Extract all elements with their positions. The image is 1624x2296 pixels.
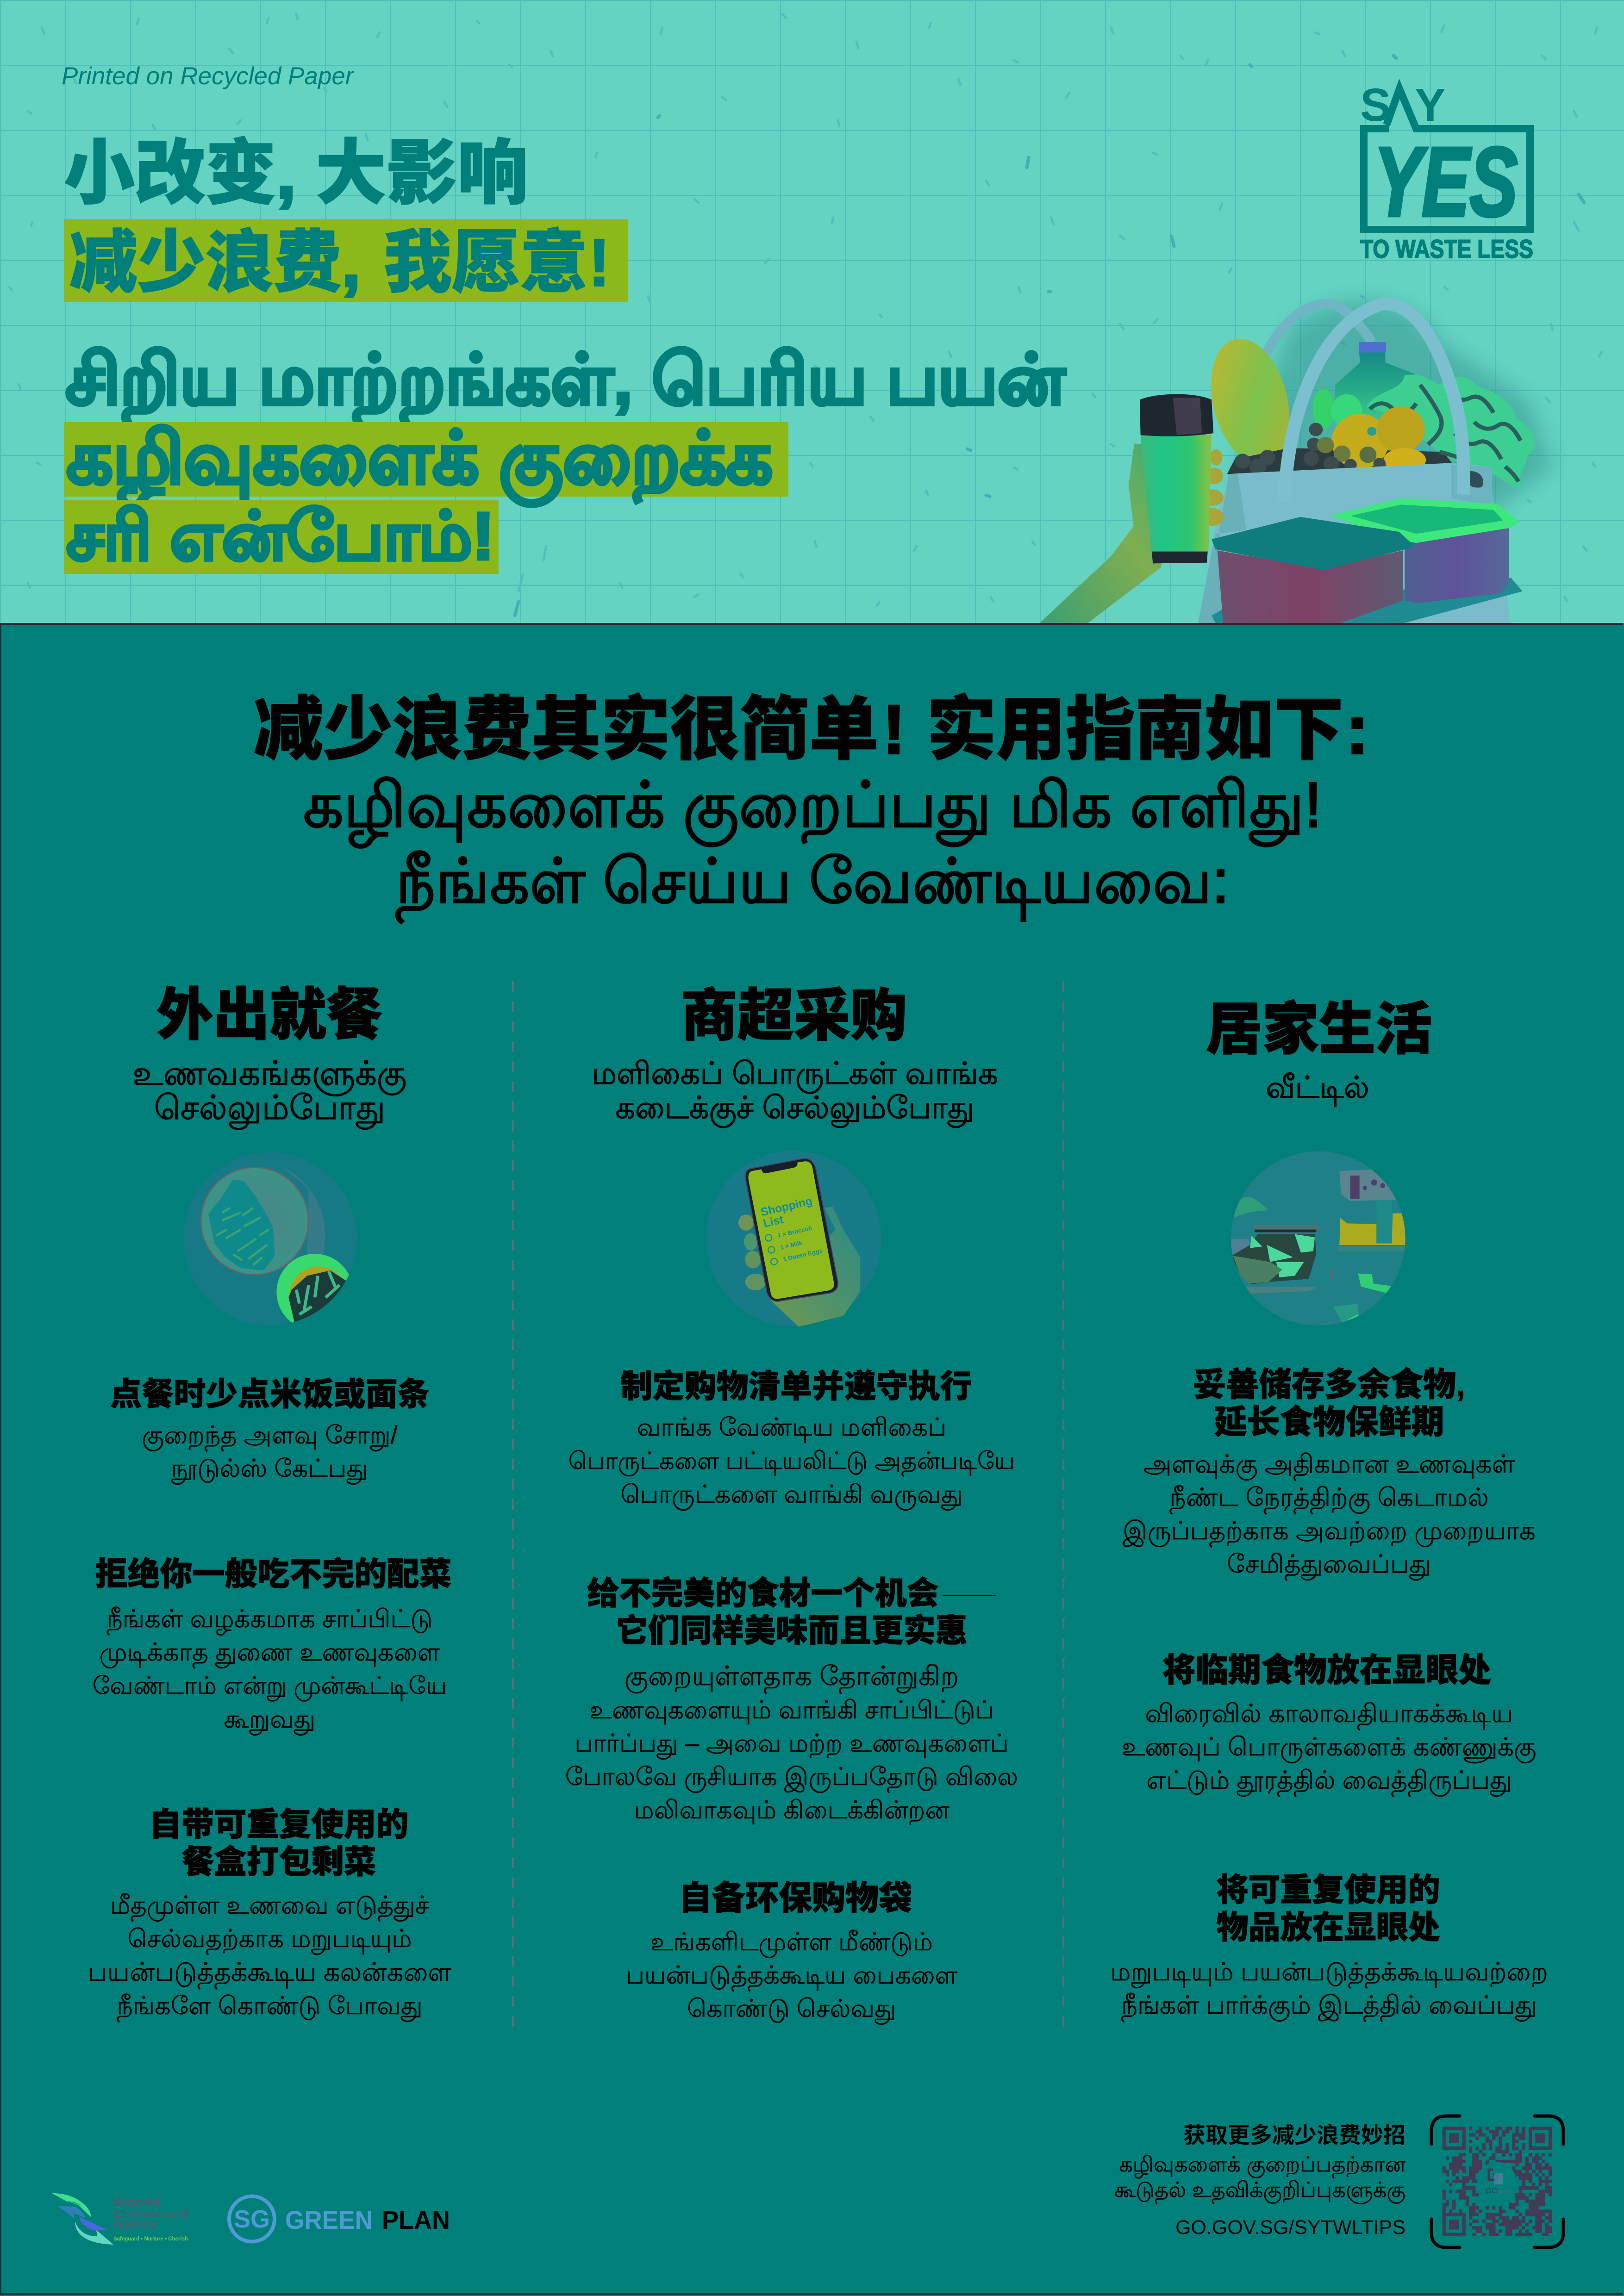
callout: more tips text: GO.GOV.SG/SYTWLTIPS — [1175, 2216, 1405, 2239]
tip: refuse side dishes: வேண்டாம் என்று முன்கூட்டியே — [93, 1672, 447, 1699]
tip: expiring food in sight — [1069, 1652, 1589, 1797]
logo: SG Green Plan: GREEN — [285, 2205, 373, 2234]
column heading: dining out: 外出就餐 — [156, 983, 382, 1046]
phone frame — [745, 1158, 838, 1301]
tip: bring reusable bags: 自备环保购物袋 — [679, 1880, 912, 1917]
shopping list text: 1 × Broccoli — [777, 1225, 812, 1239]
column subheading: dining out: செல்லும்போது — [154, 1089, 385, 1126]
tip: reusables in sight: மறுபடியும் பயன்படுத்தக்கூடியவற்றை — [1110, 1957, 1548, 1986]
bag body — [1198, 463, 1511, 623]
red lunch box — [1212, 517, 1416, 623]
tip: refuse side dishes — [28, 1556, 512, 1736]
tip: imperfect produce: 它们同样美味而且更实惠 — [616, 1613, 968, 1649]
shopping list text: 1 Dozen Eggs — [782, 1247, 823, 1263]
tip: bring reusable containers: செல்வதற்காக மறுபடியும் — [127, 1925, 412, 1953]
logo: SG Green Plan: SG — [234, 2205, 270, 2233]
tip: imperfect produce: மலிவாகவும் கிடைக்கின்றன — [634, 1796, 949, 1824]
heading: Chinese guide title: 减少浪费其实很简单! 实用指南如下: — [254, 691, 1369, 768]
tip: bring reusable bags: கொண்டு செல்வது — [687, 1995, 896, 2022]
tip: store leftovers — [1069, 1366, 1589, 1580]
tip: reusables in sight: நீங்கள் பார்க்கும் இடத்தில் வைப்பது — [1121, 1991, 1537, 2019]
tip: imperfect produce: போலவே ருசியாக இருப்பதோடு விலை — [565, 1763, 1018, 1791]
logo: say yes to waste less — [1352, 79, 1546, 264]
title: Tamil headline: சிறிய மாற்றங்கள், பெரிய பயன் — [66, 341, 1065, 418]
tip: store leftovers: 延长食物保鲜期 — [1214, 1404, 1444, 1441]
title highlight: Chinese tagline: 减少浪费, 我愿意! — [69, 225, 611, 301]
panel: top banner background — [0, 0, 1624, 623]
logo: say yes to waste less: S — [1360, 79, 1391, 131]
back handle — [1266, 304, 1372, 355]
tip: shopping list: 制定购物清单并遵守执行 — [620, 1369, 972, 1404]
title highlight: Tamil tagline line one: கழிவுகளைக் குறைக்க — [67, 418, 773, 498]
grapes — [1235, 423, 1386, 475]
panel: grocery shopping column — [516, 972, 1067, 2036]
tip: less rice or noodles — [28, 1375, 512, 1485]
tip: refuse side dishes: கூறுவது — [224, 1705, 315, 1733]
tip: bring reusable containers: 餐盒打包剩菜 — [181, 1844, 376, 1880]
column subheading: at home: வீட்டில் — [1266, 1070, 1369, 1104]
rice — [208, 1179, 275, 1270]
heading: Tamil guide title: நீங்கள் செய்ய வேண்டியவை: — [396, 847, 1229, 916]
shopping list text: Shopping — [760, 1195, 813, 1219]
tip: less rice or noodles: குறைந்த அளவு சோறு/ — [142, 1421, 398, 1449]
logo: National Environment Agency: Environment — [113, 2206, 188, 2220]
column dividers — [509, 981, 1069, 2036]
heading: Tamil guide title — [0, 767, 1624, 920]
panel: dining out column — [28, 972, 512, 2036]
logo: National Environment Agency: Safeguard • Nurture • Cherish — [113, 2235, 188, 2242]
front handle — [1285, 304, 1464, 502]
QR code with scan brackets: gov.sg — [1495, 2189, 1510, 2195]
jug — [1335, 342, 1416, 418]
tip: less rice or noodles: 点餐时少点米饭或面条 — [110, 1376, 430, 1412]
tip: reusables in sight: 物品放在显眼处 — [1217, 1910, 1440, 1945]
logo: SG Green Plan — [225, 2191, 456, 2247]
callout: more tips text: 获取更多减少浪费妙招 — [1183, 2123, 1405, 2148]
tip: refuse side dishes: நீங்கள் வழக்கமாக சாப்பிட்டு — [106, 1605, 433, 1633]
phone screen — [748, 1161, 834, 1299]
tip: bring reusable containers — [28, 1806, 512, 2022]
tip: bring reusable containers: 自带可重复使用的 — [149, 1806, 408, 1842]
logo: National Environment Agency: Agency — [113, 2216, 157, 2230]
QR code with scan brackets: GO — [1486, 2186, 1498, 2195]
side dish — [276, 1254, 349, 1323]
jar of greens — [1254, 1225, 1318, 1232]
callout: more tips text: கூடுதல் உதவிக்குறிப்புகளுக்கு — [1114, 2178, 1405, 2202]
tip: refuse side dishes: 拒绝你一般吃不完的配菜 — [95, 1556, 452, 1592]
icon: rice and side dish plates — [183, 1152, 356, 1325]
column subheading: dining out: உணவகங்களுக்கு — [133, 1055, 406, 1092]
tip: store leftovers: 妥善储存多余食物, — [1193, 1367, 1465, 1403]
tip: imperfect produce: 给不完美的食材一个机会 — [587, 1575, 939, 1611]
travel cup — [1140, 394, 1213, 563]
logo: SG Green Plan: PLAN — [382, 2205, 450, 2234]
logo: say yes to waste less: Y — [1415, 79, 1446, 131]
column subheading: dining out — [28, 1057, 512, 1125]
tip: bring reusable bags: உங்களிடமுள்ள மீண்டும் — [650, 1928, 933, 1956]
glow behind bag — [1235, 300, 1553, 511]
callout: more tips text — [1065, 2122, 1405, 2239]
tip: shopping list: பொருட்களை பட்டியலிட்டு அதன்படியே — [568, 1448, 1015, 1475]
icon: phone with shopping list in hand — [697, 1143, 891, 1338]
column subheading: grocery shopping: கடைக்குச் செல்லும்போது — [615, 1090, 974, 1125]
tip: imperfect produce — [516, 1574, 1067, 1827]
lettuce — [1366, 375, 1535, 487]
tip: expiring food in sight: விரைவில் காலாவதியாகக்கூடிய — [1145, 1699, 1513, 1728]
fingers — [1202, 449, 1224, 526]
tip: less rice or noodles: நூடுல்ஸ் கேட்பது — [171, 1455, 368, 1482]
tip: shopping list: வாங்க வேண்டிய மளிகைப் — [637, 1413, 946, 1441]
tip: expiring food in sight: எட்டும் தூரத்தில் வைத்திருப்பது — [1146, 1766, 1512, 1794]
tip: bring reusable bags: பயன்படுத்தக்கூடிய பைகளை — [626, 1961, 957, 1989]
tip: shopping list: பொருட்களை வாங்கி வருவது — [620, 1481, 963, 1508]
tip: imperfect produce: குறையுள்ளதாக தோன்றுகிற — [625, 1661, 959, 1691]
shopping list text — [758, 1195, 824, 1266]
tip: imperfect produce: உணவுகளையும் வாங்கி சாப்பிட்டுப் — [589, 1696, 994, 1724]
fruit — [1313, 389, 1426, 472]
tip: store leftovers: சேமித்துவைப்பது — [1227, 1549, 1431, 1578]
column subheading: grocery shopping — [519, 1057, 1070, 1125]
hand and arm — [1040, 444, 1162, 623]
tip: reusables in sight: 将可重复使用的 — [1217, 1872, 1440, 1908]
logo: National Environment Agency — [46, 2189, 194, 2249]
tip: store leftovers: அளவுக்கு அதிகமான உணவுகள் — [1143, 1450, 1515, 1478]
heading: Tamil guide title: கழிவுகளைக் குறைப்பது மிக எளிது! — [303, 770, 1322, 840]
title highlight: Tamil tagline line two: சரி என்போம்! — [67, 499, 494, 573]
bag interior dark — [1227, 448, 1455, 474]
hand — [771, 1207, 860, 1327]
tip: bring reusable bags — [516, 1880, 1067, 2025]
base tray — [1212, 578, 1523, 623]
tip: bring reusable containers: பயன்படுத்தக்கூடிய கலன்களை — [88, 1957, 451, 1986]
icon: fridge with stored food — [1231, 1151, 1405, 1325]
QR code with scan brackets — [1428, 2113, 1567, 2252]
shopping list text: List — [762, 1213, 785, 1230]
tip: refuse side dishes: முடிக்காத துணை உணவுகளை — [100, 1638, 440, 1666]
tip: bring reusable containers: மீதமுள்ள உணவை எடுத்துச் — [110, 1892, 429, 1919]
tip: reusables in sight — [1069, 1871, 1589, 2022]
logo: National Environment Agency: National — [113, 2195, 161, 2209]
bread — [1199, 331, 1301, 472]
column heading: at home: 居家生活 — [1206, 998, 1432, 1061]
purple lunch box — [1330, 498, 1520, 603]
tip: imperfect produce: பார்ப்பது – அவை மற்ற உணவுகளைப் — [575, 1730, 1009, 1757]
shopping list text: 1 × Milk — [780, 1239, 803, 1251]
callout: more tips text: கழிவுகளைக் குறைப்பதற்கான — [1119, 2152, 1405, 2176]
tip: store leftovers: நீண்ட நேரத்திற்கு கெடாமல் — [1169, 1483, 1489, 1512]
panel: main tips section — [0, 623, 1623, 2295]
column subheading: grocery shopping: மளிகைப் பொருட்கள் வாங்க — [592, 1056, 998, 1091]
tip: expiring food in sight: உணவுப் பொருள்களைக் கண்ணுக்கு — [1122, 1732, 1537, 1761]
panel: at home column — [1069, 972, 1589, 2036]
tip: store leftovers: இருப்பதற்காக அவற்றை முறையாக — [1123, 1516, 1536, 1545]
tip: expiring food in sight: 将临期食物放在显眼处 — [1162, 1652, 1491, 1689]
scan brackets — [1431, 2116, 1563, 2247]
tip: bring reusable containers: நீங்களே கொண்டு போவது — [117, 1992, 423, 2020]
tip: shopping list — [516, 1368, 1067, 1511]
title: Chinese headline: 小改变, 大影响 — [64, 134, 528, 213]
text: printed on recycled paper: Printed on Recycled Paper — [62, 62, 353, 90]
illustration: reusable bag, food, cup and lunch boxes — [1018, 46, 1624, 623]
column heading: grocery shopping: 商超采购 — [681, 984, 907, 1047]
